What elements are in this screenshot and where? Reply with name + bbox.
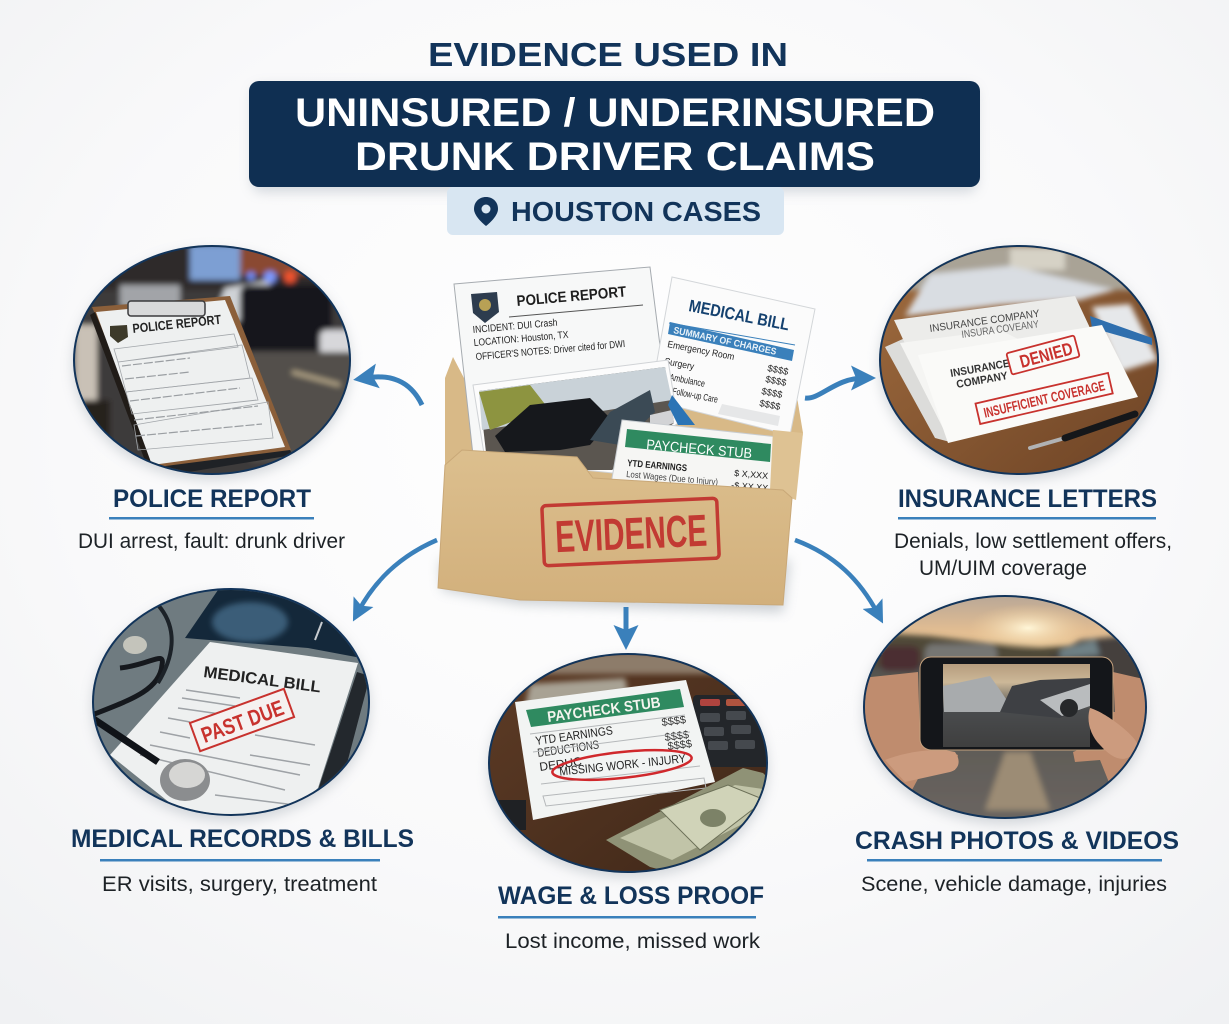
caption: police report: DUI arrest, fault: drunk driver [78, 530, 345, 553]
panel: police report photo [70, 240, 360, 480]
document: medical bill: Ambulance [668, 372, 706, 390]
document: police report: OFFICER'S NOTES: Driver cited for DWI [475, 339, 626, 363]
title banner: UNINSURED / UNDERINSURED [295, 91, 935, 135]
panel: wage and loss photo: PAYCHECK STUB [546, 694, 662, 726]
document: medical bill: $$$$ [758, 398, 782, 413]
document: medical bill: MEDICAL BILL [687, 296, 791, 334]
document: paycheck stub: PAYCHECK STUB [646, 436, 753, 461]
document: medical bill: $$$$ [766, 363, 790, 378]
arrow: to police report [365, 377, 422, 405]
panel: wage and loss photo: $$$$ [664, 729, 690, 744]
panel: wage and loss photo: YTD EARNINGS [534, 723, 614, 748]
caption: medical records: MEDICAL RECORDS & BILLS [71, 825, 414, 853]
document: paycheck stub: YTD EARNINGS [627, 458, 687, 474]
panel: insurance letters photo: COMPANY [955, 370, 1009, 391]
caption: crash photos: Scene, vehicle damage, injuries [861, 873, 1167, 896]
panel: wage and loss photo: DEDUC [538, 754, 583, 774]
caption: crash photos [855, 827, 1179, 896]
panel: medical records photo: MEDICAL BILL [202, 664, 322, 696]
panel: medical records photo: PAST DUE [198, 695, 287, 748]
document: police report: LOCATION: Houston, TX [473, 330, 569, 349]
caption: medical records [71, 825, 414, 896]
evidence stamp [542, 498, 719, 566]
arrow: to wage proof [624, 607, 628, 638]
panel: insurance letters photo: INSURANCE COMPANY [929, 308, 1040, 335]
document: medical bill: Emergency Room [666, 339, 735, 363]
caption: police report [78, 485, 345, 553]
document: paycheck stub: -$ XX,XX [731, 480, 769, 493]
caption: insurance letters: Denials, low settlement offers, [894, 530, 1172, 553]
document: police report: INCIDENT: DUI Crash [472, 318, 558, 336]
panel: insurance letters photo: INSURANCE [949, 358, 1011, 380]
panel: medical records photo [90, 588, 372, 821]
location tag: Houston cases [447, 187, 784, 235]
document: police report: POLICE REPORT [516, 283, 627, 310]
panel: insurance letters photo: INSUFFICIENT COVERAGE [982, 377, 1106, 421]
arrow: to medical records [358, 540, 437, 612]
caption: police report: POLICE REPORT [113, 485, 311, 513]
panel: wage and loss photo: DEDUCTIONS [536, 737, 600, 760]
title banner: DRUNK DRIVER CLAIMS [355, 135, 875, 179]
location tag: Houston cases: HOUSTON CASES [511, 196, 761, 227]
caption: medical records: ER visits, surgery, treatment [102, 873, 377, 896]
document: medical bill: $$$$ [760, 386, 784, 401]
caption: insurance letters: INSURANCE LETTERS [898, 485, 1157, 513]
document: crash photo [473, 360, 695, 473]
panel: police report photo: POLICE REPORT [132, 312, 222, 336]
caption: insurance letters: UM/UIM coverage [919, 557, 1087, 580]
document: paycheck stub: Lost Wages (Due to Injury) [626, 469, 718, 487]
caption: insurance letters [894, 485, 1172, 580]
document: paycheck stub: $ X,XXX [734, 468, 769, 481]
panel: wage and loss photo: $$$$ [661, 714, 687, 729]
title: evidence used in: EVIDENCE USED IN [428, 36, 788, 73]
caption: crash photos: CRASH PHOTOS & VIDEOS [855, 827, 1179, 855]
document: medical bill: Follow-up Care [671, 386, 719, 406]
document: paycheck stub [610, 420, 778, 510]
panel: wage and loss photo: MISSING WORK - INJURY [559, 751, 686, 779]
document: medical bill: Surgery [663, 356, 695, 373]
panel: crash photos photo [862, 595, 1150, 824]
folder back [445, 357, 803, 500]
panel: insurance letters photo: DENIED [1017, 339, 1075, 372]
panel: insurance letters photo [879, 245, 1160, 480]
caption: wage and loss: WAGE & LOSS PROOF [498, 882, 764, 910]
document: medical bill [650, 277, 815, 435]
document: medical bill: $$$$ [764, 374, 788, 389]
caption: wage and loss [498, 882, 764, 953]
arrow: to crash photos [795, 540, 878, 614]
folder [438, 267, 815, 612]
folder front [438, 450, 792, 605]
panel: wage and loss photo [488, 652, 790, 880]
caption: wage and loss: Lost income, missed work [505, 930, 761, 953]
title banner [249, 81, 980, 192]
evidence stamp: EVIDENCE [554, 505, 708, 562]
document: medical bill: SUMMARY OF CHARGES [672, 325, 777, 358]
arrow: to insurance letters [805, 378, 864, 398]
folder right flap [770, 430, 803, 500]
document: police report [454, 267, 672, 455]
panel: wage and loss photo: $$$$ [667, 738, 693, 753]
panel: insurance letters photo: INSURA COVEANY [961, 318, 1040, 341]
